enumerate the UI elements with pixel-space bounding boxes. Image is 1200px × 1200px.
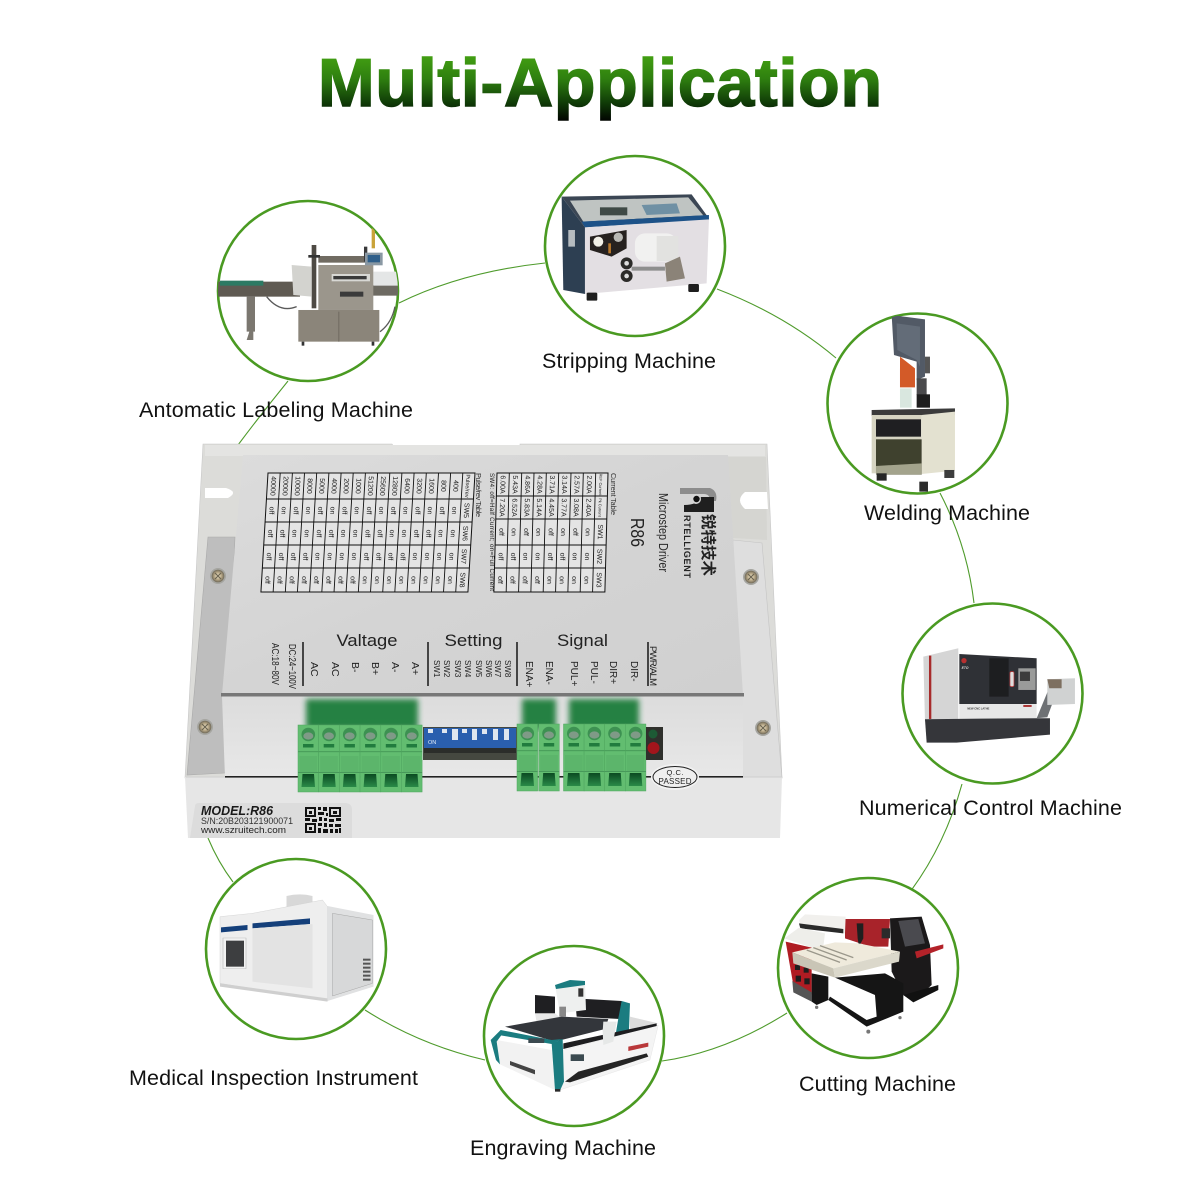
current table: on [558,576,565,584]
setting switch labels: SW5 [474,660,483,678]
setting switch labels: SW6 [484,660,493,678]
pulse table: on [434,576,441,584]
pulse table: on [377,507,384,514]
pulse table: off [277,553,284,560]
current table: off [497,553,504,560]
current table: 2.40A [584,498,592,517]
pulse table: off [336,576,344,584]
signal terminal labels: DIR- [628,661,639,682]
pulse table: off [340,507,348,514]
voltage terminal labels [308,662,421,677]
label: stripping: Stripping Machine [542,349,716,373]
machine: engraving [491,980,658,1092]
model name: R86 [627,518,647,547]
brand name latin: RTELLIGENT [682,515,692,578]
current table: on [534,528,541,536]
qc passed seal: Q.C. [666,768,684,777]
pulse table: 400 [451,480,459,492]
current table: 3.08A [572,498,579,517]
current table: off [521,576,528,584]
signal terminal labels: PUL+ [568,661,579,686]
current table: Pk Current [597,498,603,518]
machine: cutting [784,914,943,1034]
pulse table: 1000 [354,478,362,494]
current table: on [571,553,578,560]
current table: SW2 [595,549,603,564]
setting switch labels: SW8 [503,660,512,678]
panel: medical inspection instrument [129,859,418,1090]
pulse table: off [266,530,273,537]
pulse table: off [265,553,272,560]
pulse table: 5000 [317,478,325,494]
mounting slots [205,488,768,509]
product label: MODEL:R86 [201,804,274,818]
pulse table: off [287,576,295,584]
pulse table: Pulse/rev [463,474,470,498]
pulse table: on [313,553,321,560]
pulse table: on [373,576,380,584]
current table: SW1 [596,524,603,540]
pulse table: on [450,507,457,514]
signal terminal labels: DIR+ [607,661,618,684]
terminal block enable [517,724,559,791]
pulse table: on [446,576,453,584]
pulse table: on [435,553,442,560]
voltage terminal labels: B+ [369,662,381,675]
pulse table: off [301,553,308,560]
pulse table: off [438,507,445,514]
panel: numerical control machine [859,604,1122,820]
pulse table: on [426,507,433,514]
setting switch labels: SW4 [463,660,472,678]
pulse table: off [324,576,331,584]
pulse table: 3200 [415,478,422,494]
current table: off [508,576,515,584]
pulse table: 4000 [329,478,337,494]
current table: on [584,528,591,536]
circle: medical [206,859,386,1039]
current table: off [546,553,553,560]
current table heading: Current Table [609,473,618,515]
qc passed seal [651,764,699,790]
pulse table: SW8 [458,572,466,588]
current table: 4.45A [547,498,555,517]
current table: 5.43A [511,475,518,494]
brand name chinese: 锐特技术 [699,514,718,576]
power range labels [269,643,297,689]
pulse table heading: Pulse/rev Table [474,473,483,517]
machine: stripping [562,194,709,301]
current table: 6.00A [498,475,506,494]
product type: Microstep Driver [656,493,671,573]
pulse table: on [401,507,409,514]
panel: cutting machine [778,878,958,1096]
pulse table [261,473,475,592]
pulse table: off [316,507,323,514]
pulse table: off [289,553,296,560]
panel: stepper driver [185,444,782,838]
pulse table: SW7 [459,549,467,564]
pulse table: 1600 [427,478,435,494]
pulse table: on [350,553,357,560]
pulse table: 6400 [402,478,410,494]
pulse table: on [388,530,395,537]
power range labels: DC:24~100V [286,644,297,689]
circle: cutting [778,878,958,1058]
signal terminal labels [523,661,639,688]
pulse table: on [302,530,310,537]
pulse table: off [389,507,396,514]
power range labels: AC:18~80V [269,643,280,685]
voltage terminal labels: AC [329,662,341,677]
panel: stripping machine [542,156,725,373]
pulse table: off [386,553,394,560]
current table: REF Current [598,474,603,496]
setting switch labels: SW7 [493,660,502,678]
current table: 4.28A [535,475,543,494]
alarm label: PWR/ALM [647,646,658,686]
qr code [305,807,341,833]
label: welding: Welding Machine [864,501,1030,525]
pulse table: on [290,530,298,537]
pulse table: on [447,553,455,560]
current table: on [559,528,566,536]
setting switch labels: SW3 [453,660,462,678]
current table: SW3 [594,572,602,588]
pulse table: on [448,530,456,537]
circle: welding [828,314,1008,494]
current table: off [571,528,578,536]
current table [494,473,608,592]
pulse table: SW5 [462,503,470,518]
pulse table: 10000 [293,476,301,496]
label: labeling: Antomatic Labeling Machine [139,398,413,422]
current table: 6.52A [510,498,518,517]
half current note: SW4: off=Half Current; on=Full Current [488,473,495,591]
label: cnc: Numerical Control Machine [859,796,1122,820]
signal terminal labels: ENA- [543,661,554,685]
pulse table: off [278,530,286,537]
pulse table: on [304,507,311,514]
driver base flanges [185,444,782,778]
pulse table: 51200 [366,476,374,496]
pulse table: on [361,576,368,584]
panel: engraving machine [470,946,664,1160]
current table: off [533,576,540,584]
pulse table: off [375,530,383,537]
top plate [222,455,743,695]
pulse table: off [312,576,319,584]
dip switch [423,727,517,760]
current table: 2.00A [585,475,592,494]
pulse table: on [279,507,287,514]
pulse table: on [325,553,333,560]
current table: 5.83A [522,498,530,517]
current table: on [521,553,528,560]
logo [680,488,716,512]
pulse table: off [275,576,283,584]
machine: cnc [923,648,1075,743]
label: engraving: Engraving Machine [470,1136,656,1160]
pulse table: off [267,507,275,514]
product label [190,803,352,838]
circle: stripping [545,156,725,336]
pulse table: on [385,576,392,584]
current table: on [570,576,577,584]
pulse table: on [411,553,418,560]
setting switch labels: SW2 [442,660,451,678]
current table: 3.77A [559,498,567,517]
current table: on [534,553,541,560]
pulse table: off [413,507,421,514]
current table: 4.86A [523,475,530,494]
label: cutting: Cutting Machine [799,1072,956,1096]
pulse table: 20000 [281,476,289,496]
pulse table: on [423,553,430,560]
qc passed seal: PASSED [658,777,692,786]
green connector shadows [306,699,639,729]
pulse table: 25600 [378,476,386,496]
pulse table: on [352,507,360,514]
section headings [336,631,608,650]
current table: on [510,528,517,536]
front panel [222,696,743,778]
circle: engraving [484,946,664,1126]
title: Multi-Application [318,45,882,121]
signal terminal labels: PUL- [588,661,599,684]
voltage terminal labels: A- [389,662,401,673]
pulse table: 12800 [390,476,398,496]
pulse table: 40000 [268,476,277,496]
current table: off [497,528,504,536]
circle: labeling [218,201,398,381]
pulse table: off [300,576,307,584]
panel: welding machine [828,314,1030,525]
pulse table: SW6 [460,526,468,541]
screws [197,568,771,736]
dip switch: ON [428,740,436,746]
section dividers [303,642,648,686]
section headings: Setting [444,631,502,650]
voltage terminal labels: A+ [409,662,421,675]
setting switch labels: SW1 [432,660,441,678]
terminal block signal [564,724,646,791]
product label: S/N:20B203121900071 [201,816,293,826]
label: medical: Medical Inspection Instrument [129,1066,418,1090]
pulse table: off [292,507,299,514]
connector lines [208,263,974,1061]
pulse table: on [397,576,404,584]
machine: medical [220,894,374,1002]
pulse table: off [412,530,419,537]
current table: off [509,553,516,560]
pulse table: 2000 [341,478,349,494]
panel: automatic labeling machine [139,201,413,422]
current table: 3.14A [560,475,567,494]
signal terminal labels: ENA+ [523,661,534,688]
pulse table: off [374,553,382,560]
current table: on [545,576,552,584]
pulse table: off [327,530,334,537]
current table: off [522,528,529,536]
pulse table: 8000 [305,478,313,494]
lower front face [185,777,782,838]
current table: on [583,553,590,560]
pulse table: 800 [439,480,447,492]
product label: www.szruitech.com [200,825,286,836]
pulse table: on [421,576,429,584]
status leds [646,727,663,760]
machine: cnc: ETO [962,666,969,670]
current table: 7.20A [498,498,505,517]
machine: welding [872,315,955,492]
setting switch labels [432,660,512,678]
current table: off [558,553,565,560]
pulse table: on [436,530,444,537]
voltage terminal labels: AC [308,662,320,677]
pulse table: on [328,507,336,514]
pulse table: off [263,576,271,584]
pulse table: on [338,553,345,560]
pulse table: off [398,553,406,560]
current table: 3.71A [548,475,555,494]
section headings: Signal [557,631,608,650]
pulse table: off [362,553,369,560]
section headings: Valtage [336,631,398,650]
pulse table: off [348,576,356,584]
pulse table: on [339,530,346,537]
current table: 5.14A [535,498,542,517]
circle: cnc [902,604,1082,784]
pulse table: off [363,530,371,537]
current table: 2.57A [572,475,580,494]
pulse table: on [400,530,407,537]
pulse table: on [351,530,359,537]
current table: on [582,576,589,584]
pulse table: off [315,530,322,537]
current table: off [496,576,503,584]
current table: off [547,528,554,536]
pulse table: off [424,530,432,537]
machine: labeling [217,228,400,346]
pulse table: on [409,576,417,584]
machine: cnc: NEW CNC LATHE [967,707,990,711]
terminal block voltage [298,725,422,792]
pulse table: off [365,507,372,514]
voltage terminal labels: B- [349,662,361,673]
